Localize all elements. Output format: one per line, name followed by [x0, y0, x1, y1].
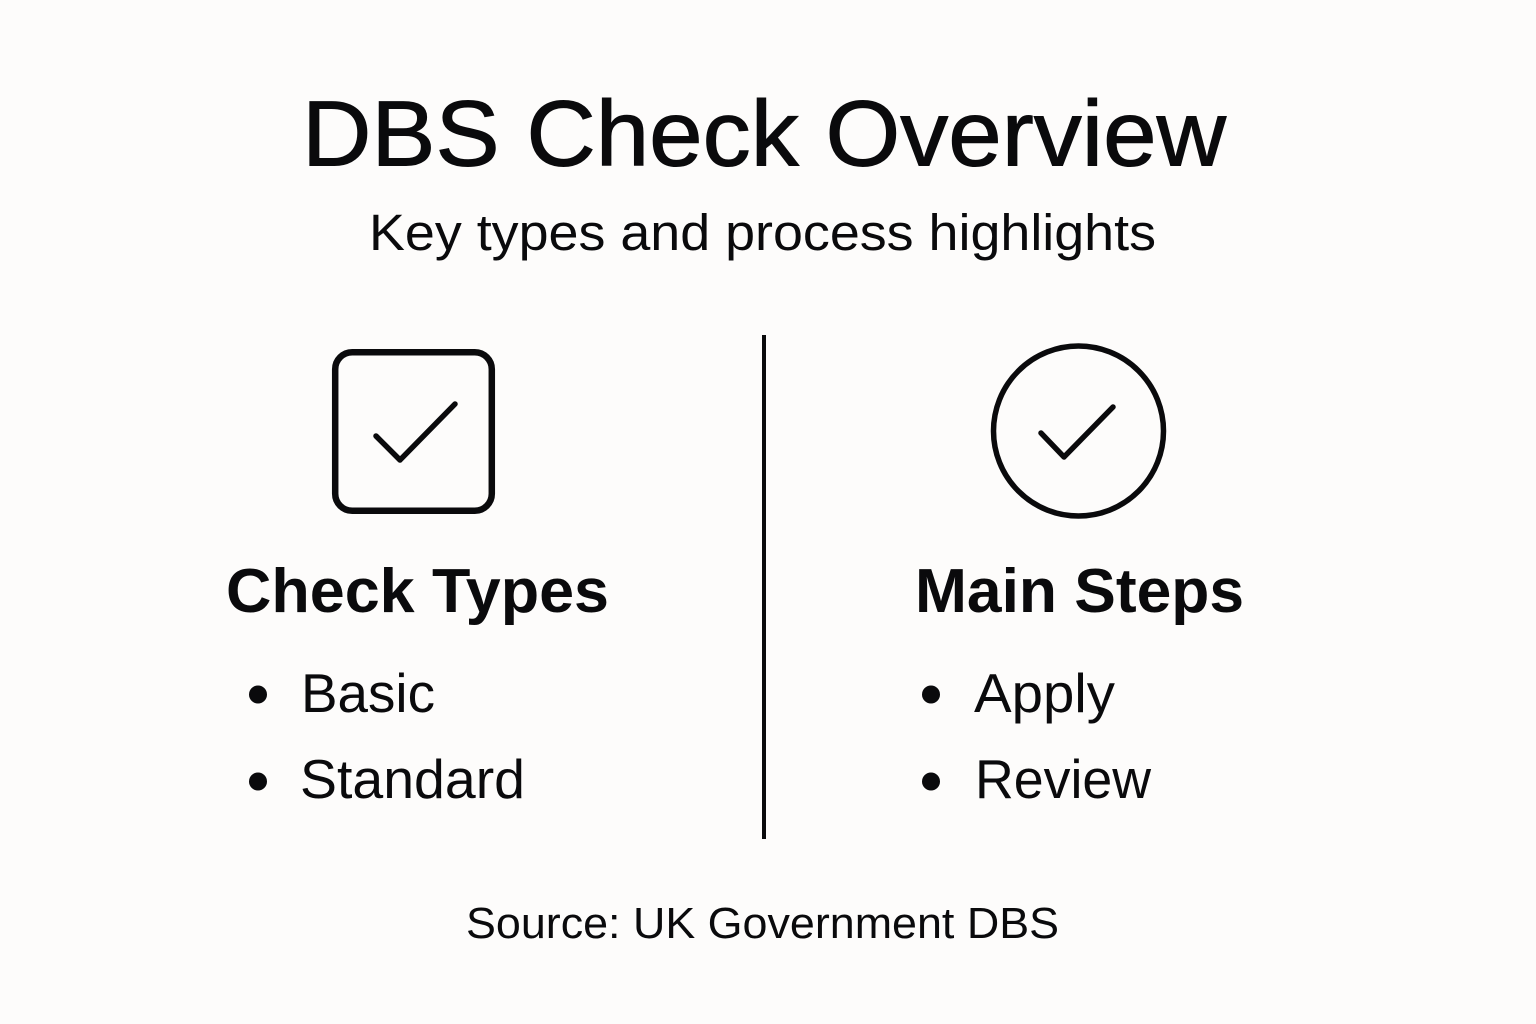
list: main steps: Apply	[974, 662, 1115, 724]
list: check types: Standard	[300, 748, 525, 810]
list: check types: Basic	[301, 662, 435, 724]
icon: checkbox with check mark	[335, 352, 492, 511]
panel: main steps	[915, 346, 1244, 810]
list: main steps: Review	[975, 748, 1151, 810]
center divider	[762, 335, 766, 839]
icon: circle with check mark	[994, 346, 1164, 516]
subtitle: Key types and process highlights	[369, 204, 1156, 261]
source note: Source: UK Government DBS	[466, 899, 1059, 948]
title: DBS Check Overview	[302, 82, 1227, 186]
panel: check types	[226, 352, 609, 810]
list: main steps	[922, 662, 1151, 810]
heading: check types: Check Types	[226, 557, 609, 626]
list: check types	[249, 662, 525, 810]
heading: main steps: Main Steps	[915, 557, 1244, 626]
